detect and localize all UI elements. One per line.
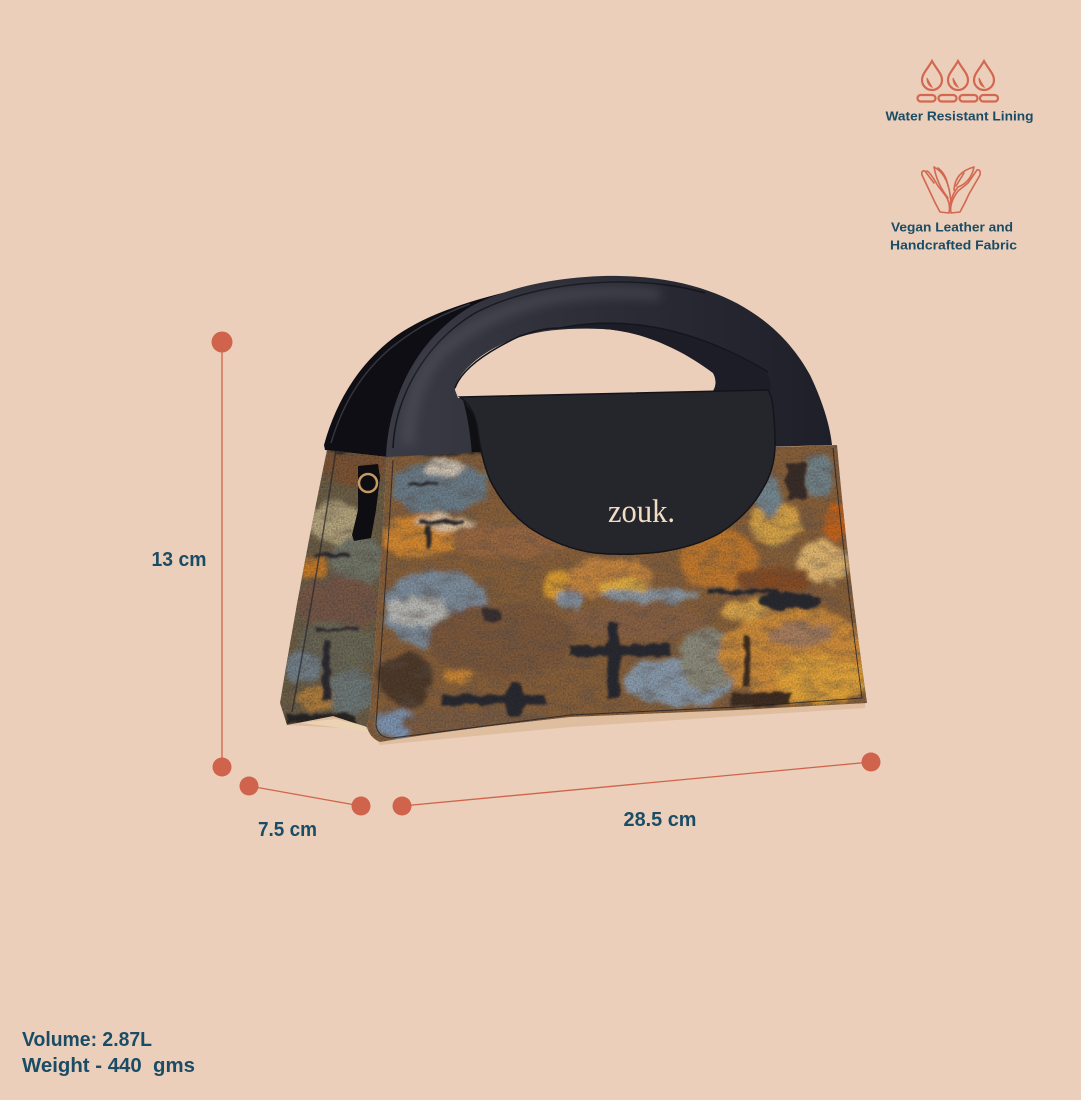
icon: hands holding leaf [922,167,980,213]
side panel fabric [280,450,387,727]
icon: water resistant lining [918,61,998,102]
handle highlight [408,292,660,445]
label: vegan leather and handcrafted fabric [890,220,1017,252]
dimension: width [392,752,880,816]
icon: water surface pills [918,95,998,102]
front flap [460,390,775,554]
front handle [386,276,832,458]
dimension: depth [240,776,370,816]
front panel fabric [360,440,880,750]
volume and weight [22,1028,195,1077]
icon: water drops [922,61,994,90]
volume and weight: Volume: 2.87L [22,1028,152,1051]
bag shadow underside [287,700,865,745]
label: 28.5 cm: 28.5 cm [624,808,696,831]
volume and weight: Weight - 440 gms [22,1054,195,1077]
handle stitching [393,282,768,448]
back handle [324,281,600,458]
strap clip and ring [352,464,380,541]
brand logo: zouk. [608,494,675,530]
dimension: height [212,332,232,776]
label: 7.5 cm: 7.5 cm [258,818,317,841]
bag illustration [270,276,880,750]
label: water resistant lining: Water Resistant Lining [886,108,1034,124]
label: vegan leather and handcrafted fabric: Handcrafted Fabric [890,238,1017,252]
dark gap left of flap [463,400,486,460]
label: vegan leather and handcrafted fabric: Vegan Leather and [891,220,1013,234]
label: 13 cm: 13 cm [152,548,206,571]
panel stitching [376,448,862,738]
handle inner lip [560,324,771,392]
